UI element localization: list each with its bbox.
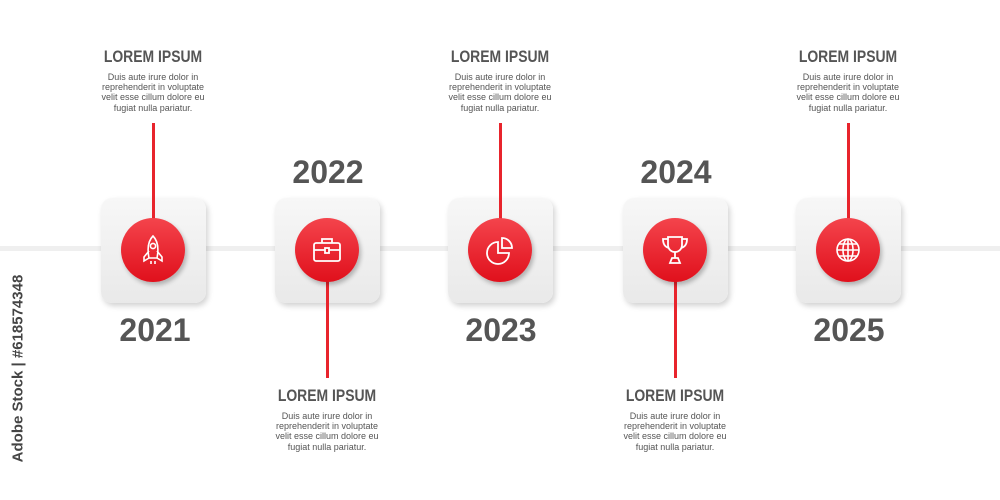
item 2021 [100, 47, 210, 348]
year 2023: 2023 [465, 312, 537, 348]
icon: briefcase [295, 218, 359, 282]
year 2024: 2024 [640, 154, 712, 190]
text: item 2: LOREM IPSUM [278, 386, 376, 405]
text: item 3 [448, 47, 552, 113]
connector 3 [499, 123, 502, 219]
square card 5 [796, 198, 901, 303]
text: item 4 [623, 386, 727, 452]
text: item 5 [796, 47, 900, 113]
square card 4 [623, 198, 728, 303]
text: item 2 [275, 386, 379, 452]
square card 2 [275, 198, 380, 303]
year 2025: 2025 [813, 312, 885, 348]
text: item 4: Duis aute irure dolor in reprehenderit in voluptate velit esse cillum dolore eu fugiat nulla pariatur. [623, 411, 727, 452]
item 2024 [622, 154, 732, 452]
text: item 3: LOREM IPSUM [451, 47, 549, 66]
item 2025 [796, 47, 906, 348]
square card 3 [448, 198, 553, 303]
year 2022: 2022 [292, 154, 364, 190]
watermark side text: Adobe Stock | #618574348 [10, 275, 26, 462]
text: item 1: LOREM IPSUM [104, 47, 202, 66]
text: item 3: Duis aute irure dolor in reprehenderit in voluptate velit esse cillum dolore eu fugiat nulla pariatur. [448, 72, 552, 113]
text: item 4: LOREM IPSUM [626, 386, 724, 405]
icon: globe [816, 218, 880, 282]
icon: rocket [121, 218, 185, 282]
text: item 5: LOREM IPSUM [799, 47, 897, 66]
connector 2 [326, 280, 329, 378]
item 2022 [274, 154, 384, 452]
connector 4 [674, 280, 677, 378]
text: item 1 [101, 47, 205, 113]
year 2021: 2021 [119, 312, 191, 348]
square card 1 [101, 198, 206, 303]
connector 1 [152, 123, 155, 219]
text: item 2: Duis aute irure dolor in reprehenderit in voluptate velit esse cillum dolore eu fugiat nulla pariatur. [275, 411, 379, 452]
icon: trophy [643, 218, 707, 282]
text: item 5: Duis aute irure dolor in reprehenderit in voluptate velit esse cillum dolore eu fugiat nulla pariatur. [796, 72, 900, 113]
item 2023 [448, 47, 558, 348]
text: item 1: Duis aute irure dolor in reprehenderit in voluptate velit esse cillum dolore eu fugiat nulla pariatur. [101, 72, 205, 113]
connector 5 [847, 123, 850, 219]
icon: pie chart [468, 218, 532, 282]
